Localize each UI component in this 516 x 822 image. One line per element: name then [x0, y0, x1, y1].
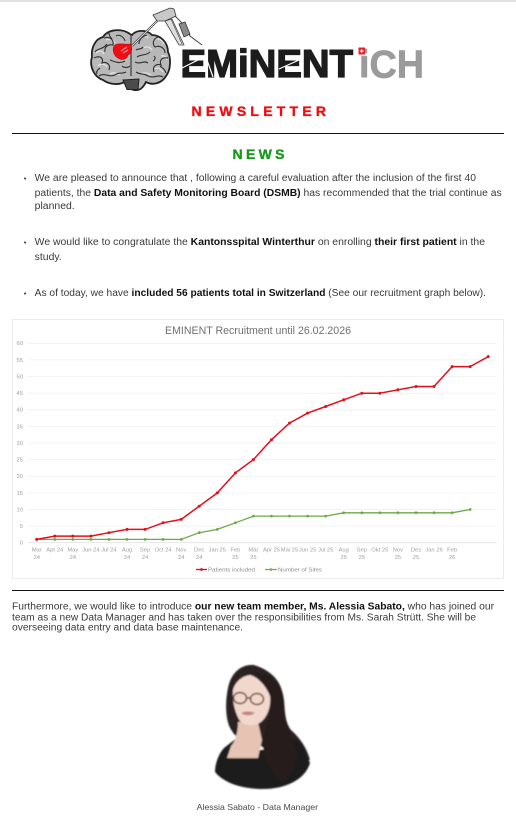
wordmark: iCH [359, 43, 424, 86]
x axis labels: 24 [178, 555, 185, 561]
y axis labels: 55 [17, 358, 23, 364]
x axis labels: Jun 24 [82, 548, 100, 554]
heading: newsletter: NEWSLETTER [192, 103, 326, 119]
x axis labels: Mär [248, 548, 258, 554]
text block: new team member: overseeing data entry and data base maintenance. [12, 623, 243, 634]
mouth [241, 712, 255, 715]
x axis labels: 24 [142, 555, 149, 561]
x axis labels: 25 [395, 555, 401, 561]
x axis labels: Jan 25 [209, 548, 226, 554]
legend [196, 568, 322, 574]
wordmark: EMiNENT [180, 43, 353, 86]
legend: Patients included [208, 568, 255, 574]
panel: recruitment line chart [12, 320, 504, 578]
glasses [234, 692, 264, 704]
x axis labels: Oct 24 [155, 548, 172, 554]
legend: Number of Sites [278, 568, 322, 574]
news item: Winterthur [24, 237, 485, 263]
y axis labels: 25 [17, 458, 23, 464]
x axis labels: Mar [32, 548, 42, 554]
y axis labels: 35 [17, 424, 23, 430]
line: number of sites [37, 510, 470, 539]
x axis labels: Aug [339, 548, 349, 554]
x axis labels: 24 [70, 555, 77, 561]
top [215, 735, 310, 789]
x axis labels: Apr 24 [46, 548, 64, 554]
logo [91, 8, 424, 90]
news list [24, 173, 502, 299]
x axis labels: 26 [449, 555, 455, 561]
x axis labels: Sep [140, 548, 150, 554]
y axis labels: 5 [20, 524, 23, 530]
text block: new team member: Furthermore, we would like to introduce our new team member, Ms. Alessia Sabato, who has joined our [12, 602, 495, 612]
top bar [0, 0, 516, 2]
y axis labels: 15 [17, 491, 23, 497]
y axis labels: 30 [17, 441, 23, 447]
x axis labels: 24 [33, 555, 41, 561]
text block: new team member: team as a new Data Manager and has taken over the responsibilities from Ms. Sarah Strütt. She will be [12, 613, 476, 624]
caption: Alessia Sabato - Data Manager [197, 802, 318, 812]
x axis labels: Jul 24 [101, 548, 117, 554]
heading: news: NEWS [232, 146, 284, 162]
icon: Swiss flag [358, 48, 365, 54]
news item: DSMB: We are pleased to announce that , following a careful evaluation after the inclusion of the first 40 [35, 173, 477, 184]
line: patients included [37, 357, 488, 539]
x axis labels: 25 [359, 555, 365, 561]
x axis labels: 25 [232, 555, 239, 561]
icon: brain with robotic arm [91, 8, 202, 90]
x axis labels: Aug [122, 548, 132, 554]
y axis labels: 10 [17, 507, 23, 513]
x axis labels: Dec [194, 548, 204, 554]
hair back [226, 665, 310, 760]
portrait photo [215, 665, 310, 789]
x axis labels: Nov [176, 548, 186, 554]
x axis labels: May [67, 548, 78, 554]
y axis labels: 45 [17, 391, 23, 397]
news item: DSMB: planned. [35, 201, 75, 212]
news item: Winterthur: We would like to congratulate the Kantonsspital Winterthur on enrolling their first patient in the [35, 237, 485, 248]
news item: Winterthur: study. [35, 252, 62, 263]
x axis labels: Nov [393, 548, 403, 554]
x axis labels: 25 [413, 555, 419, 561]
x axis labels: Dez [411, 548, 421, 554]
chart title: EMINENT Recruitment until 26.02.2026 [165, 325, 351, 337]
x axis labels: 24 [124, 555, 131, 561]
y axis labels: 40 [17, 408, 23, 414]
x axis labels: 24 [196, 555, 203, 561]
x axis labels: Feb [447, 548, 457, 554]
x axis labels: Mai 25 [281, 548, 298, 554]
y axis labels: 60 [17, 341, 23, 347]
x axis labels: Apr 25 [263, 548, 280, 554]
hair strands [254, 672, 296, 783]
x axis labels: 25 [250, 555, 257, 561]
x axis labels: Feb [230, 548, 240, 554]
neck and chest [227, 722, 262, 758]
news item: DSMB: patients, the Data and Safety Monitoring Board (DSMB) has recommended that the trial continue as [35, 188, 502, 199]
y axis labels: 0 [20, 541, 23, 547]
face [233, 675, 270, 725]
x axis labels: Jan 26 [425, 548, 443, 554]
x axis labels: Jul 25 [318, 548, 333, 554]
x axis labels: Jun 25 [299, 548, 316, 554]
x axis labels [32, 548, 457, 561]
text block: new team member [12, 602, 495, 634]
x axis labels: Okt 25 [371, 548, 388, 554]
y axis labels: 20 [17, 474, 23, 480]
y axis labels: 50 [17, 374, 23, 380]
y axis labels [17, 341, 23, 547]
x axis labels: Sep [357, 548, 367, 554]
x axis labels: 25 [340, 555, 347, 561]
news item: recruitment total: As of today, we have included 56 patients total in Switzerland (See our recruitment graph below). [35, 288, 486, 299]
news item: DSMB [24, 173, 502, 212]
